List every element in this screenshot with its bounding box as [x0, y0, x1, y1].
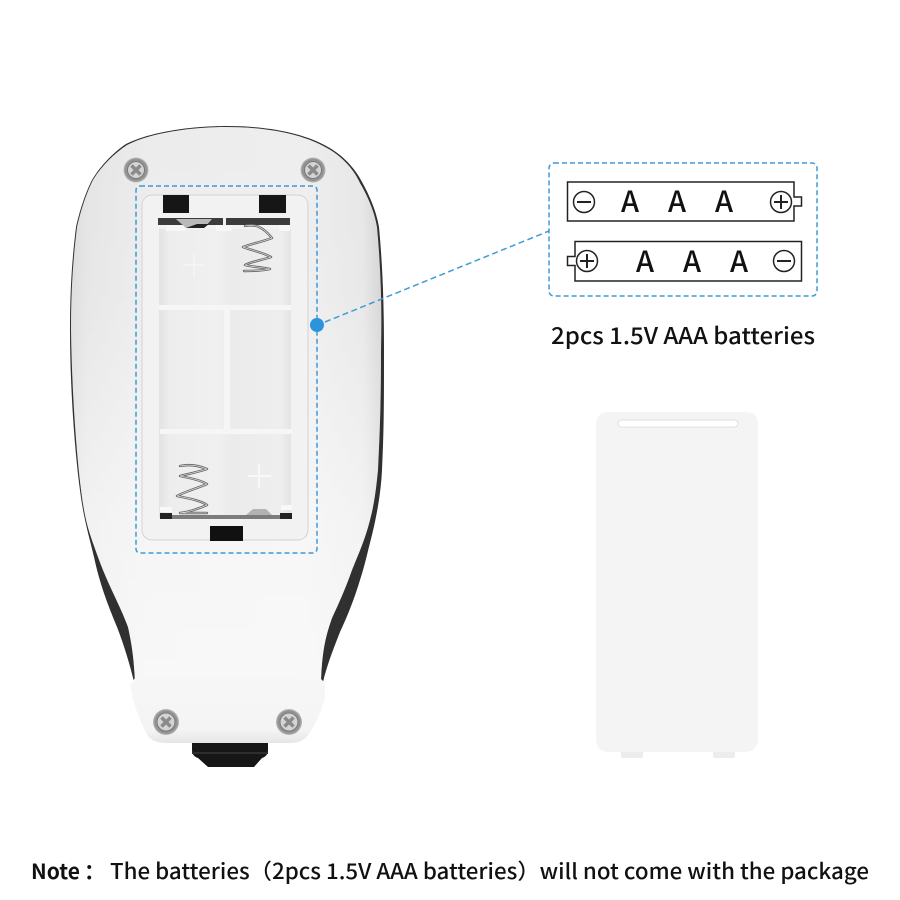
battery: top — [568, 179, 802, 221]
battery: bottom — [568, 239, 802, 281]
battery caption: 2pcs 1.5V AAA batteries — [551, 317, 815, 351]
callout: blue dot — [310, 318, 324, 332]
screw: bottom left — [153, 709, 179, 735]
note label: Note： — [31, 856, 105, 886]
note text: The batteries（2pcs 1.5V AAA batteries）will not come with the package — [110, 855, 869, 886]
callout: dashed highlight around compartment — [136, 186, 317, 553]
device side grip (dark rim) — [70, 126, 384, 682]
device white body — [71, 127, 381, 682]
battery: bottom: A — [636, 239, 655, 281]
battery: top: A — [668, 179, 687, 221]
battery: top: A — [621, 179, 640, 221]
device: coating thickness gauge back — [70, 126, 384, 767]
battery: bottom: A — [730, 239, 749, 281]
bottom spring — [177, 465, 207, 513]
top spring — [243, 225, 272, 271]
device body highlight — [71, 127, 381, 682]
battery compartment — [142, 195, 308, 541]
moulded plus: bottom — [248, 464, 271, 488]
battery: top: A — [715, 179, 734, 221]
panel: batteries — [549, 163, 817, 296]
upper metal contacts — [158, 218, 290, 231]
compartment frame — [142, 195, 308, 540]
lower black notch — [210, 519, 243, 541]
compartment well — [159, 229, 291, 518]
panel border — [549, 163, 817, 296]
callout: connector line — [325, 231, 549, 322]
moulded plus: top — [183, 254, 205, 276]
note — [31, 855, 869, 886]
cross ribs — [159, 305, 292, 434]
device probe — [192, 740, 268, 767]
device bottom cap — [130, 676, 325, 743]
lower metal contact — [160, 505, 292, 519]
screw: top left — [124, 158, 148, 182]
battery cover — [596, 412, 758, 758]
upper black clips — [163, 195, 286, 213]
screw: top right — [300, 158, 326, 182]
screw: bottom right — [276, 709, 302, 735]
battery: bottom: A — [683, 239, 702, 281]
